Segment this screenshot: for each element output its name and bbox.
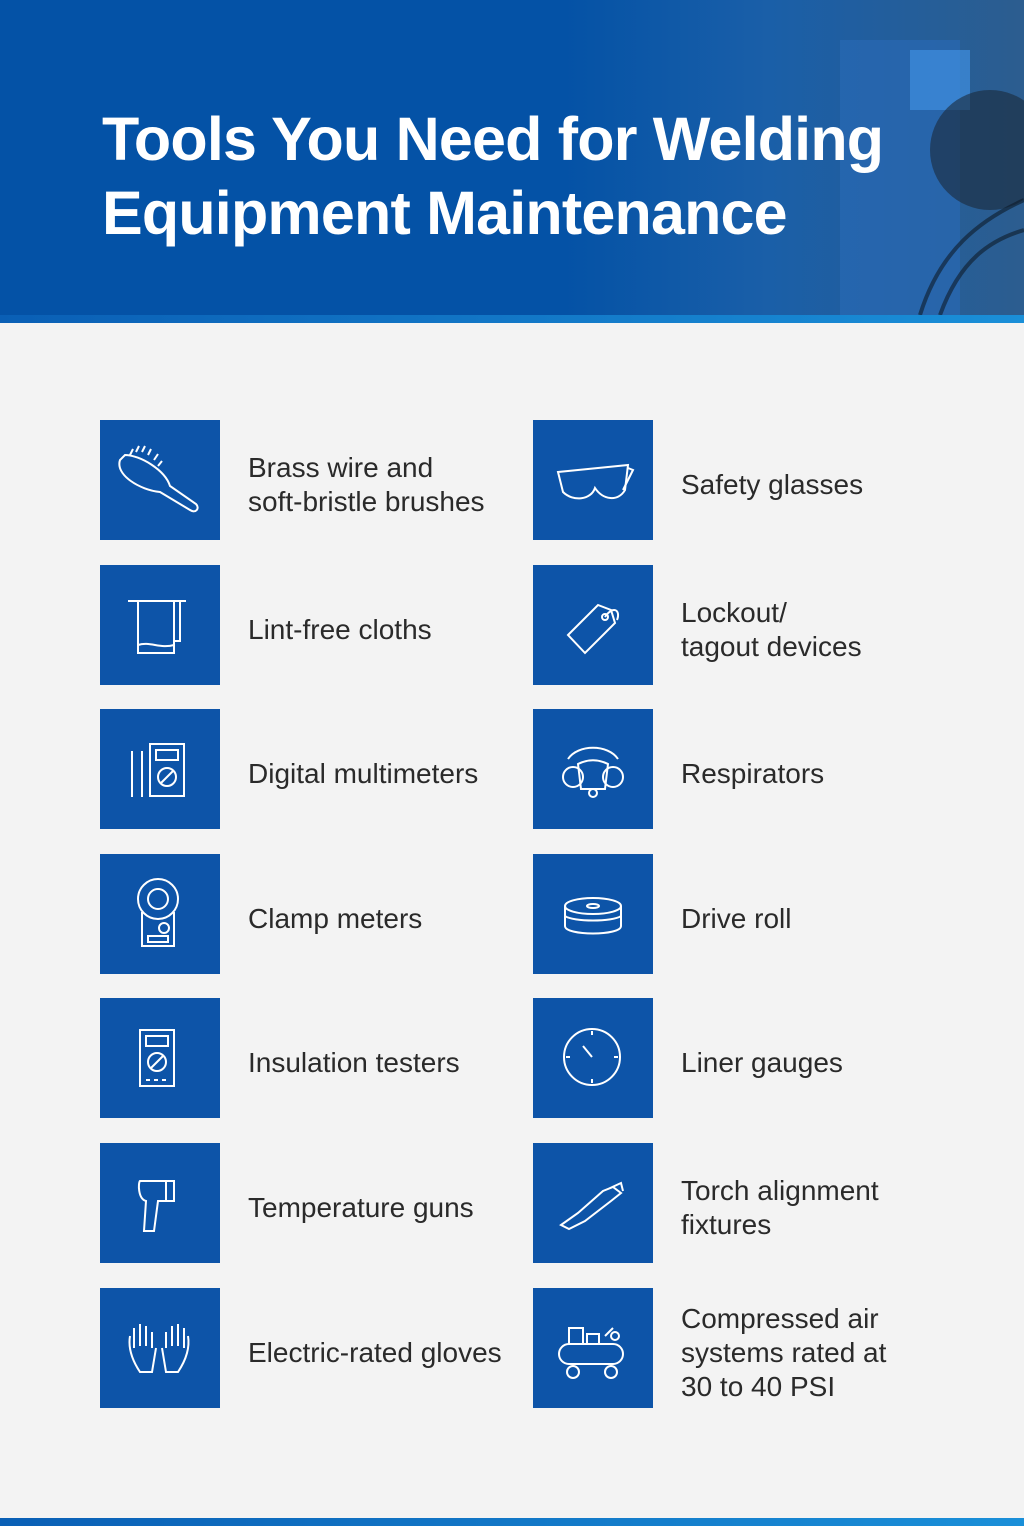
text: brushes: soft-bristle brushes [248,486,485,517]
text: lockout [681,597,862,662]
title: Equipment Maintenance [102,179,787,247]
item: cloths [100,565,220,685]
item: multimeter [100,709,220,829]
text: brushes: Brass wire and [248,452,433,483]
text: brushes [248,452,485,517]
item: compressor [533,1288,653,1408]
text: multimeter: Digital multimeters [248,758,478,789]
text: insulation tester: Insulation testers [248,1047,460,1078]
item: respirator [533,709,653,829]
item: drive roll [533,854,653,974]
text: compressor [681,1303,886,1402]
header banner [0,0,1024,315]
item: lockout [533,565,653,685]
text: compressor: systems rated at [681,1337,886,1368]
item: insulation tester [100,998,220,1118]
item: gloves [100,1288,220,1408]
text: cloths: Lint-free cloths [248,614,432,645]
text: respirator: Respirators [681,758,824,789]
text: drive roll: Drive roll [681,903,791,934]
text: compressor: 30 to 40 PSI [681,1371,835,1402]
text: gloves: Electric-rated gloves [248,1337,502,1368]
text: clamp meter: Clamp meters [248,903,422,934]
text: torch [681,1175,879,1240]
title [102,105,883,247]
text: compressor: Compressed air [681,1303,879,1334]
text: torch: Torch alignment [681,1175,879,1206]
item: torch [533,1143,653,1263]
text: liner gauge: Liner gauges [681,1047,843,1078]
machinery backdrop [840,40,1024,315]
item: safety glasses [533,420,653,540]
text: lockout: tagout devices [681,631,862,662]
text: torch: fixtures [681,1209,771,1240]
item: brushes [100,420,220,540]
item: liner gauge [533,998,653,1118]
item: temperature gun [100,1143,220,1263]
item: clamp meter [100,854,220,974]
title: Tools You Need for Welding [102,105,883,173]
text: safety glasses: Safety glasses [681,469,863,500]
text: temperature gun: Temperature guns [248,1192,474,1223]
text: lockout: Lockout/ [681,597,787,628]
